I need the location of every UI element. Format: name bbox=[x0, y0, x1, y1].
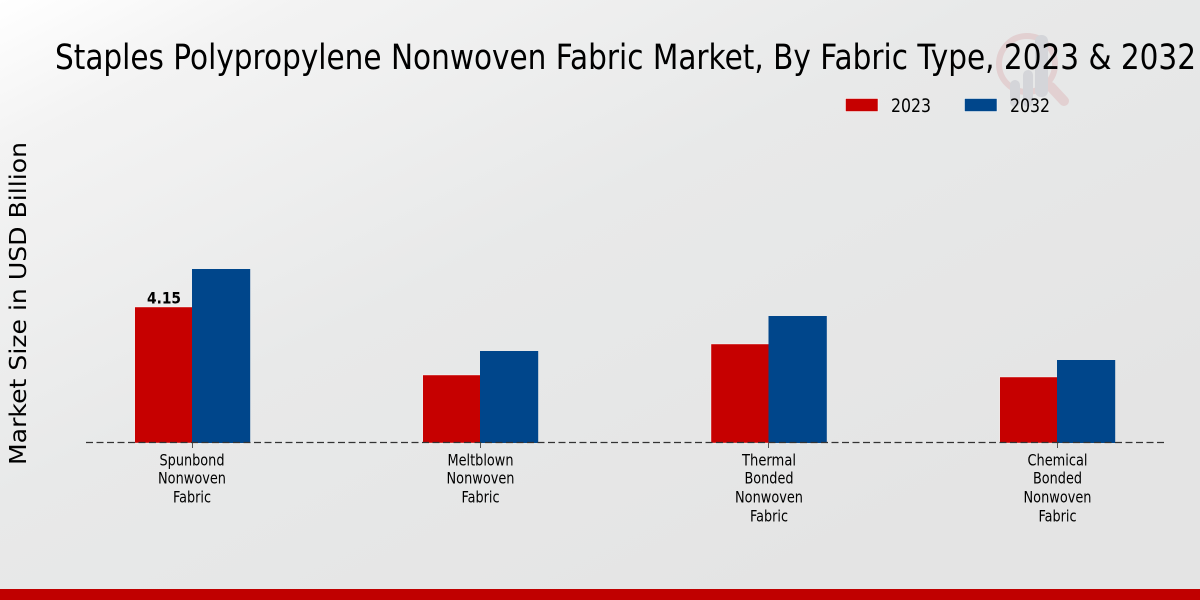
category label: Thermal Bonded Nonwoven Fabric bbox=[735, 450, 803, 526]
category label: Meltblown Nonwoven Fabric: Meltblown bbox=[448, 450, 514, 470]
bars: Spunbond Nonwoven Fabric bbox=[135, 269, 250, 443]
category label: Spunbond Nonwoven Fabric: Fabric bbox=[173, 488, 211, 506]
watermark logo bbox=[999, 35, 1064, 107]
bar chart bbox=[86, 269, 1164, 443]
category label: Thermal Bonded Nonwoven Fabric: Thermal bbox=[741, 450, 796, 470]
category label: Spunbond Nonwoven Fabric: Spunbond bbox=[160, 450, 224, 470]
legend swatch: 2032 bbox=[964, 98, 997, 112]
category label: Thermal Bonded Nonwoven Fabric: Nonwoven bbox=[735, 488, 803, 506]
bars: Thermal Bonded Nonwoven Fabric bbox=[711, 316, 827, 443]
category label: Thermal Bonded Nonwoven Fabric: Bonded bbox=[744, 468, 794, 488]
x axis ticks bbox=[192, 443, 1058, 448]
category label: Meltblown Nonwoven Fabric: Nonwoven bbox=[446, 468, 514, 488]
category label: Chemical Bonded Nonwoven Fabric: Fabric bbox=[1038, 506, 1076, 526]
category label: Spunbond Nonwoven Fabric bbox=[158, 450, 226, 506]
category label: Chemical Bonded Nonwoven Fabric: Chemical bbox=[1028, 450, 1088, 470]
category label: Meltblown Nonwoven Fabric bbox=[446, 450, 514, 506]
category label: Spunbond Nonwoven Fabric: Nonwoven bbox=[158, 468, 226, 488]
footer bar bbox=[0, 589, 1200, 600]
legend label: 2023: 2023 bbox=[891, 95, 931, 117]
category label: Chemical Bonded Nonwoven Fabric: Bonded bbox=[1033, 468, 1082, 488]
category label: Meltblown Nonwoven Fabric: Fabric bbox=[462, 488, 500, 506]
x axis baseline bbox=[86, 442, 1164, 444]
category label: Thermal Bonded Nonwoven Fabric: Fabric bbox=[750, 506, 788, 526]
bars: Chemical Bonded Nonwoven Fabric bbox=[1000, 360, 1115, 443]
data label: 4.15: 4.15 bbox=[147, 288, 181, 308]
legend label: 2032: 2032 bbox=[1010, 95, 1050, 117]
legend bbox=[846, 95, 1050, 117]
y axis title: Market Size in USD Billion bbox=[6, 142, 32, 465]
category label: Chemical Bonded Nonwoven Fabric: Nonwoven bbox=[1024, 488, 1092, 506]
bars: Meltblown Nonwoven Fabric bbox=[423, 351, 538, 443]
category label: Chemical Bonded Nonwoven Fabric bbox=[1024, 450, 1092, 526]
legend swatch: 2023 bbox=[846, 98, 878, 112]
